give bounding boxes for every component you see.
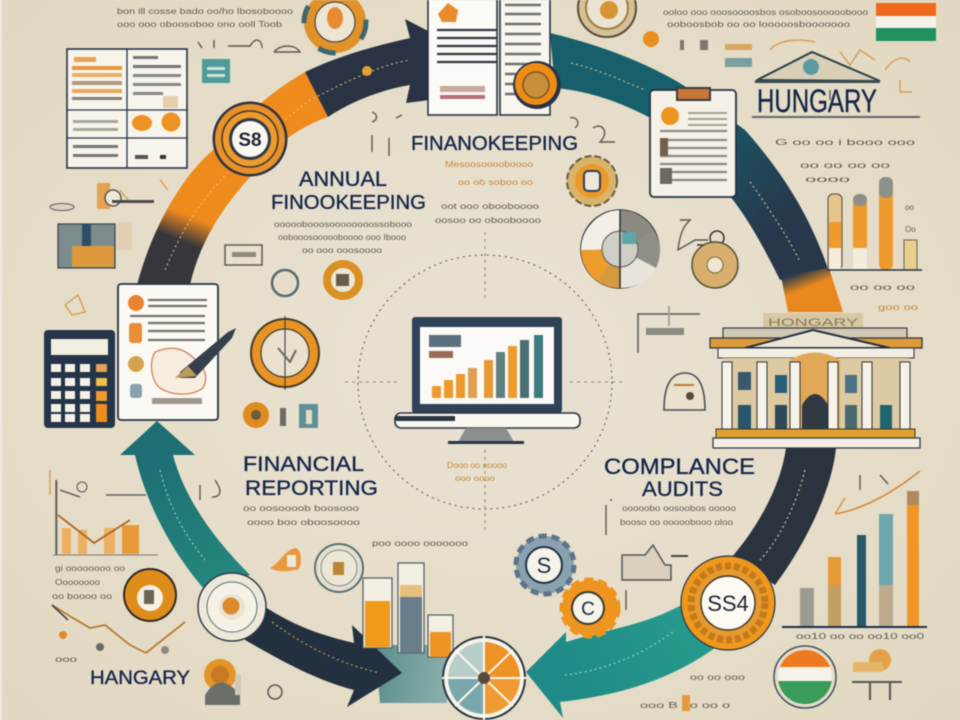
title: annual bookkeeping: ANNUAL	[299, 168, 387, 191]
icon: gear with hexagon	[567, 156, 617, 206]
icon: small stamp bottom left	[204, 659, 282, 705]
small labels right of bars: oo oo oo	[850, 283, 916, 292]
coin top centre	[578, 0, 636, 37]
text block: centre caption	[447, 461, 508, 483]
icon: small plaque	[225, 245, 262, 265]
medal	[123, 568, 177, 622]
title: financial reporting: FINANCIAL	[243, 453, 364, 476]
icon: orange key	[270, 548, 301, 571]
text block: top right: ooboosbob oo oo looooosbooooooo	[667, 20, 851, 29]
icon: small swatches top right	[680, 40, 752, 67]
scattered marks	[56, 40, 888, 610]
title: hangary: HANGARY	[90, 668, 190, 689]
line chart lower left	[52, 605, 185, 664]
badge: orange coin top	[513, 61, 561, 109]
arrow: bottom right teal into wheel	[526, 600, 715, 718]
text block: under compliance audits: booso oo ooooobooo oloo	[620, 518, 734, 527]
text block: under financial reporting: oo oosoooob boosooo	[243, 504, 360, 513]
text block: under annual	[274, 220, 413, 255]
ring badge on lower arrow	[198, 573, 266, 641]
bottom-left document with pen	[118, 284, 236, 420]
icon: small objects left	[50, 183, 154, 210]
text block: under financial reporting: oooo boo oboosoooo	[247, 518, 361, 527]
text block: under compliance audits	[620, 504, 737, 527]
heading: hungary temple: HUNGARY	[757, 83, 877, 119]
building: hungarian parliament	[710, 313, 922, 448]
text block: under financial keeping	[435, 160, 542, 225]
icon: small gear	[272, 270, 298, 296]
icon: small labels bottom: oo oo ooo	[690, 673, 746, 682]
text block: under financial reporting	[243, 504, 361, 527]
text block: under financial keeping: Mesoosooooboooo	[445, 160, 534, 169]
small labels right of bars: oo	[905, 203, 914, 212]
bar chart: bottom right: oo10 oo oo oo10 oo0	[796, 632, 925, 641]
icon: small plaque centre right	[638, 306, 700, 353]
bar chart: bottom centre	[363, 563, 453, 657]
text block: right of pie: G oo oo i booo ooo	[775, 138, 916, 147]
arrow: bottom left dark segment	[245, 600, 447, 707]
text block: left column: gi oooooooo oo	[55, 564, 126, 573]
text block: under annual: ooooobooosoooooooossobooo	[274, 220, 413, 229]
text block: under annual: oo ooo ooosoooo	[302, 246, 383, 255]
clipboard document	[650, 88, 736, 197]
icon: target ring	[250, 316, 320, 390]
line chart lower left: ooo	[55, 655, 78, 664]
document: top centre	[428, 0, 550, 115]
icon: small labels bottom	[640, 673, 746, 711]
text block: right of pie: oo oo oo oo	[800, 161, 891, 170]
icon: small blocks under ring	[243, 402, 318, 428]
flag: hungary top right	[876, 3, 936, 41]
title: annual bookkeeping	[271, 168, 426, 214]
icon: small face plaque	[664, 373, 705, 410]
text block: centre caption: ooo oooo	[455, 474, 496, 483]
building: hungarian parliament: HONGARY	[768, 317, 859, 329]
icon: stand right bottom	[852, 649, 902, 700]
arrow: left teal segment	[120, 421, 250, 590]
text block: top left: ooo ooo oboosoboo ono ooll Toob	[117, 20, 283, 29]
pie chart	[581, 210, 660, 288]
title: financial bookkeeping: FINANOKEEPING	[411, 133, 578, 155]
bar chart: top right	[827, 177, 922, 270]
text block: top left	[117, 7, 294, 29]
icon: coin	[323, 260, 363, 300]
small labels right of bars: goo oo	[878, 303, 919, 312]
title: compliance audits	[604, 454, 755, 501]
text block: under financial keeping: oosoo oo obooboooo	[435, 216, 542, 225]
gear: C: C	[581, 599, 595, 620]
badge: S8 on arrow: S8	[238, 130, 262, 151]
gear: S	[516, 536, 574, 594]
arrow: top left segment	[137, 19, 430, 285]
badge: S8 on arrow	[212, 102, 288, 176]
text block: top left: bon ill cosse bado oo/ho lbosoboooo	[117, 7, 294, 16]
icon: small orange coin	[643, 31, 659, 47]
title: annual bookkeeping: FINOOKEEPING	[271, 192, 426, 214]
text block: top right	[663, 8, 869, 29]
small labels right of bars: Oo	[905, 225, 916, 234]
badge: SS4 medal: SS4	[707, 591, 749, 616]
badge: SS4 medal	[681, 556, 775, 650]
text block: top right: ooloo ooo ooosoooosbos osoboosooooobooo	[663, 8, 869, 17]
title: compliance audits: AUDITS	[642, 478, 723, 501]
text block: left column: Oooooooo	[55, 578, 101, 587]
icon: top gear left	[304, 0, 366, 53]
gear: S: S	[537, 553, 551, 578]
heading: hungary temple	[752, 52, 920, 119]
chart: orange bars with line	[53, 480, 158, 555]
small labels right of bars	[850, 203, 919, 312]
arrow: top right segment	[550, 33, 843, 312]
title: compliance audits: COMPLANCE	[604, 454, 755, 479]
centre dashed circle	[345, 232, 625, 530]
text block: under financial keeping: oot ooo obooboooo	[441, 202, 540, 211]
flag badge: round hungary	[774, 646, 836, 708]
bar chart: bottom right	[782, 471, 927, 641]
sticky note teal	[202, 59, 230, 83]
icon: lock coin	[692, 231, 738, 288]
text block: left column	[52, 564, 126, 601]
icon: small labels bottom: ooo B oo oo o	[640, 701, 731, 710]
arrow: lower right segment	[732, 448, 836, 585]
text block: right of pie: oooo	[805, 175, 851, 184]
gear: C	[562, 580, 618, 636]
icon: folder	[622, 545, 688, 580]
scattered orange scribbles	[50, 40, 912, 600]
text block: centre caption: Dooo oo ooooo	[447, 461, 508, 470]
calculator	[44, 330, 115, 428]
text block: left column: oo boooo oo	[52, 592, 113, 601]
text block: right of pie	[775, 138, 916, 184]
text block: under compliance audits: ooooobo oosoobos ooooo	[622, 504, 737, 513]
text block: above bars bottom: poo oooo ooooooo	[372, 539, 469, 548]
icon: bank document left	[58, 222, 132, 268]
title: financial reporting	[243, 453, 378, 500]
document table: top left	[67, 49, 187, 168]
text block: under annual: oobooosoooooboooo ooo Ibooo	[278, 233, 407, 242]
title: financial reporting: REPORTING	[245, 477, 378, 500]
laptop with bar chart	[395, 317, 580, 444]
text block: under financial keeping: oo oo soboo oo	[458, 178, 534, 187]
wheel at bottom centre	[442, 636, 526, 720]
icon: ringed coin	[315, 544, 363, 592]
